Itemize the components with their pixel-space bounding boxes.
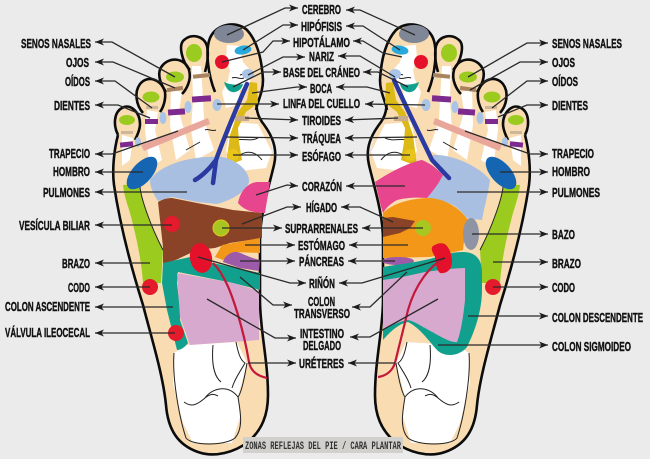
kidney	[188, 241, 214, 275]
labels: left column: VESÍCULA BILIAR	[19, 218, 90, 233]
labels: centre column: RIÑÓN	[309, 276, 335, 291]
arrows: right foot to centre labels	[336, 10, 445, 363]
labels: left column: DIENTES	[54, 98, 90, 113]
labels: centre column: PÁNCREAS	[299, 254, 344, 269]
liver	[383, 217, 415, 237]
labels: right column: HOMBRO	[552, 164, 590, 179]
labels: left column: TRAPECIO	[49, 146, 90, 161]
labels: left column: SENOS NASALES	[21, 36, 91, 51]
kidney	[432, 243, 452, 273]
colon	[383, 252, 482, 355]
labels: centre column: DELGADO	[303, 338, 341, 353]
labels: right column: DIENTES	[552, 98, 588, 113]
labels: centre column: TRANSVERSO	[294, 306, 350, 321]
ureter	[213, 263, 267, 378]
foot outline and bones	[368, 24, 530, 454]
labels: right column: BAZO	[552, 227, 575, 242]
labels: left column: OÍDOS	[65, 74, 90, 89]
stomach	[383, 198, 468, 258]
foot outline and bones	[113, 24, 275, 454]
labels: right column: PULMONES	[552, 185, 600, 200]
labels: right column: OJOS	[552, 55, 575, 70]
labels: right column	[552, 36, 643, 354]
labels: left column: PULMONES	[43, 185, 90, 200]
caption: ZONAS REFLEJAS DEL PIE / CARA PLANTAR	[245, 441, 401, 453]
labels: left column	[5, 36, 91, 340]
labels: centre column: TIROIDES	[302, 113, 341, 128]
stomach	[215, 238, 260, 260]
labels: centre column: INTESTINO	[300, 326, 344, 341]
labels: right column: TRAPECIO	[552, 146, 594, 161]
adrenal point	[213, 220, 229, 236]
labels: right column: CODO	[552, 280, 575, 295]
labels: centre column: BASE DEL CRÁNEO	[283, 65, 360, 80]
labels: right column: BRAZO	[552, 256, 581, 271]
labels: centre column: ESÓFAGO	[302, 149, 341, 164]
labels: centre column: CEREBRO	[302, 2, 341, 17]
lungs zone	[427, 155, 490, 220]
labels: centre column: HÍGADO	[306, 200, 337, 215]
small intestine	[383, 268, 465, 342]
caption	[243, 437, 403, 453]
trachea	[394, 80, 449, 178]
small intestine	[177, 273, 259, 345]
labels: centre column: CORAZÓN	[302, 179, 342, 194]
colon	[162, 257, 260, 350]
labels: centre column: TRÁQUEA	[302, 131, 341, 146]
lungs zone	[150, 157, 249, 204]
pancreas	[382, 257, 414, 265]
labels: centre column: HIPÓFISIS	[301, 19, 342, 34]
labels: left column: HOMBRO	[53, 164, 90, 179]
labels: centre column: HIPOTÁLAMO	[293, 35, 350, 50]
ileocecal valve	[168, 325, 184, 341]
labels: centre column: COLON	[308, 294, 335, 309]
adrenal point	[415, 220, 431, 236]
arrows: left foot to centre labels	[198, 8, 307, 363]
labels: left column: OJOS	[66, 55, 89, 70]
panel: left foot	[113, 24, 275, 454]
labels: centre column: BOCA	[310, 81, 332, 96]
pancreas	[223, 252, 260, 271]
labels: left column: VÁLVULA ILEOCECAL	[5, 325, 90, 340]
labels: centre column: NARIZ	[309, 49, 334, 64]
arrows: right foot side labels	[438, 43, 548, 345]
labels: left column: COLON ASCENDENTE	[5, 299, 90, 314]
labels: centre column: ESTÓMAGO	[298, 238, 345, 253]
arrows: left foot side labels	[95, 42, 187, 333]
labels: centre column	[283, 2, 360, 371]
ureter	[378, 258, 445, 377]
gallbladder point	[164, 216, 180, 232]
labels: centre column: URÉTERES	[299, 356, 344, 371]
labels: centre column: LINFA DEL CUELLO	[283, 96, 360, 111]
panel: right foot	[368, 24, 530, 454]
trachea	[195, 84, 247, 183]
heart zone	[375, 160, 443, 213]
liver	[158, 198, 262, 263]
heart zone	[238, 182, 270, 213]
labels: right column: OÍDOS	[552, 74, 578, 89]
spleen	[463, 218, 479, 250]
labels: centre column: SUPRARRENALES	[285, 221, 358, 236]
labels: left column: CODO	[68, 280, 90, 295]
labels: left column: BRAZO	[62, 256, 90, 271]
